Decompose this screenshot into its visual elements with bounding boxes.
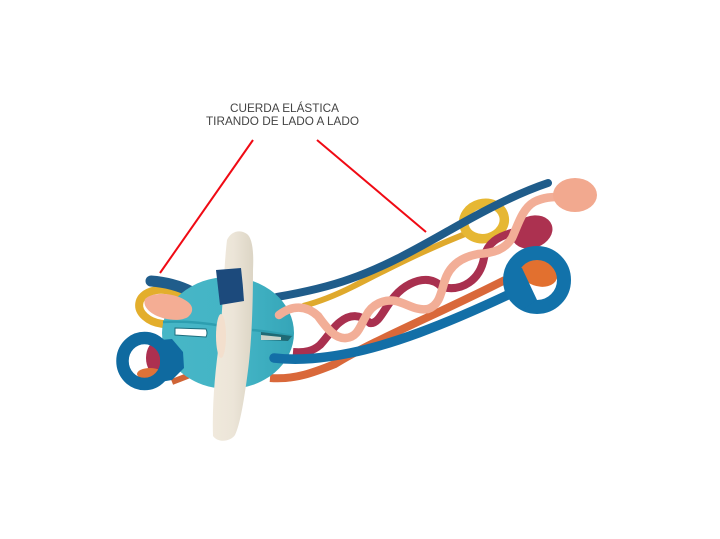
title: elastic cord caption xyxy=(206,101,359,128)
arrow: right red leader line xyxy=(317,140,426,232)
left maroon and orange pieces behind ring xyxy=(137,341,190,382)
title: elastic cord caption: TIRANDO DE LADO A LADO xyxy=(206,114,359,128)
navy cord xyxy=(151,183,548,297)
bright blue cord and ring xyxy=(274,253,564,359)
orange cord and teether head xyxy=(270,252,562,378)
arrow: left red leader line xyxy=(160,140,253,273)
teal ball xyxy=(162,277,294,389)
cream disc ring xyxy=(213,231,253,441)
pink cord and teether head xyxy=(279,178,597,338)
left blue ring xyxy=(122,338,184,384)
pink teether head left xyxy=(144,294,192,320)
toy: pull-string teether xyxy=(122,178,597,441)
title: elastic cord caption: CUERDA ELÁSTICA xyxy=(230,101,339,115)
maroon cord and teether head xyxy=(293,210,557,352)
yellow cord and ring xyxy=(137,199,508,327)
navy fabric tag xyxy=(216,268,244,305)
